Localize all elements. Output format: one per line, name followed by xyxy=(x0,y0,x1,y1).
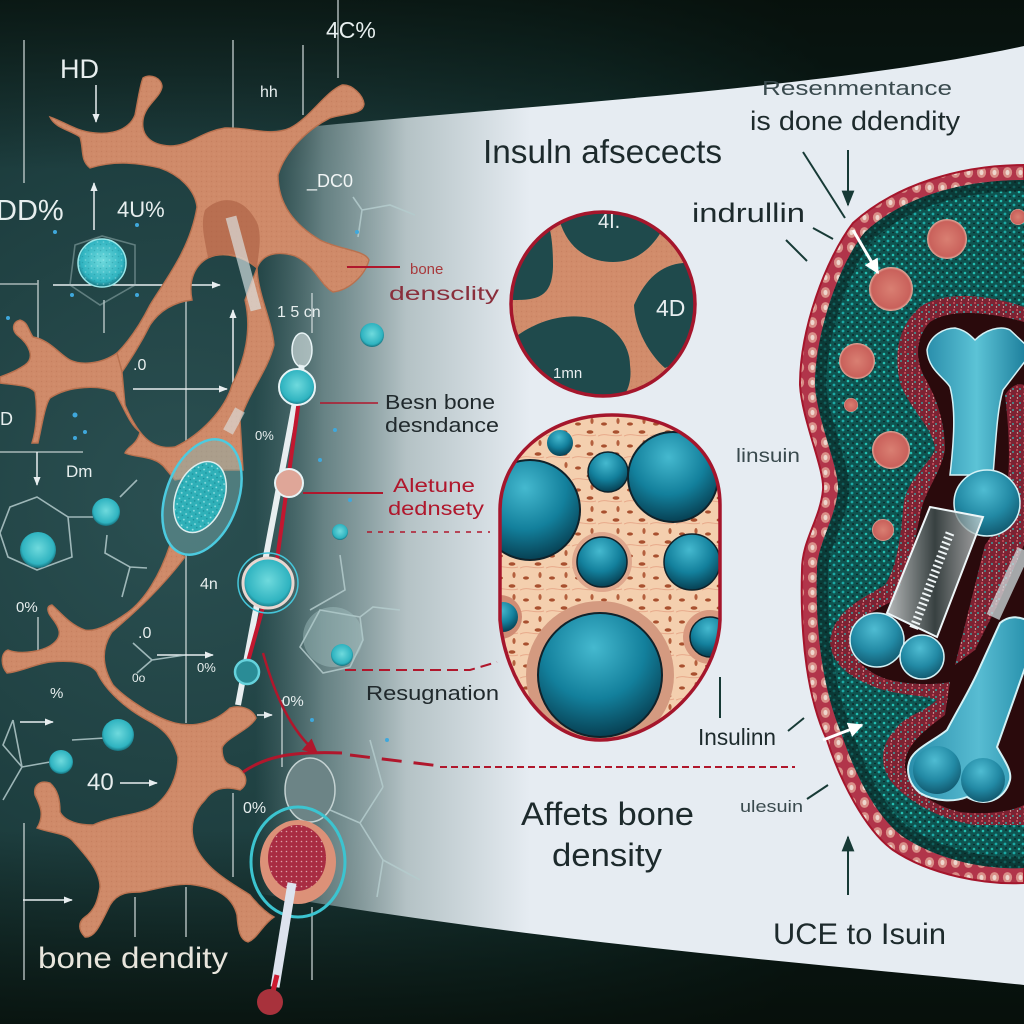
blue sparkles xyxy=(6,223,389,742)
chart labels on dark area: 1 5 cn xyxy=(277,304,321,321)
red labels: dednsety xyxy=(388,499,485,520)
glass syringe in cell xyxy=(228,217,256,432)
heading: Insuln afsecects xyxy=(483,133,722,170)
label: insulinn: Insulinn xyxy=(698,724,776,750)
upper bone xyxy=(927,328,1024,536)
dark halo around bones xyxy=(850,313,1024,813)
chart labels on dark area: _DC0 xyxy=(306,171,353,192)
circular inset: 4I. xyxy=(598,211,620,233)
chart labels on dark area: 0% xyxy=(197,660,216,675)
mid labels: Resugnation xyxy=(366,683,499,705)
bottom text: affects bone density: Affets bone xyxy=(521,796,694,832)
chart labels on dark area: 0% xyxy=(243,800,266,817)
bottom text: affects bone density: density xyxy=(552,837,662,873)
capsule xyxy=(148,428,256,566)
chart labels on dark area: .0 xyxy=(138,625,151,642)
label: insulin: linsuin xyxy=(736,446,800,467)
chart labels on dark area: 0o xyxy=(132,671,146,685)
circular inset: 1mn xyxy=(553,365,582,382)
label: indrullin: indrullin xyxy=(692,198,805,228)
right glass tube xyxy=(993,550,1024,617)
red bulb thermometer xyxy=(251,758,345,1015)
dark leader arrows xyxy=(720,150,848,895)
white arrows on organ xyxy=(823,230,878,740)
red speckle between bones xyxy=(955,384,1024,665)
lower right bone xyxy=(908,617,1024,802)
organ cross-section with bones xyxy=(800,160,1024,883)
red labels: densclity xyxy=(389,284,500,305)
cell shading xyxy=(203,200,260,268)
red labels xyxy=(388,261,500,520)
red labels: Aletune xyxy=(393,476,475,497)
chart labels on dark area: D xyxy=(0,409,13,429)
chart labels on dark area: .0 xyxy=(133,357,146,374)
red cells xyxy=(839,209,1024,541)
red leader lines xyxy=(243,267,795,772)
top right caption: is done ddendity xyxy=(750,106,961,136)
lower right bone heads xyxy=(913,746,1005,802)
speckled red band xyxy=(830,296,1024,825)
cell texture xyxy=(0,76,369,942)
chart labels on dark area xyxy=(0,17,376,817)
label: ulesuin: ulesuin xyxy=(740,797,803,816)
chart labels on dark area: 4n xyxy=(200,576,218,593)
molecule diagrams xyxy=(0,197,420,897)
chart labels on dark area: Dm xyxy=(66,462,92,481)
bottom text: uce to isuin: UCE to Isuin xyxy=(773,918,946,951)
chart labels on dark area: 4C% xyxy=(326,17,376,43)
top right caption xyxy=(750,78,961,136)
red labels: bone xyxy=(410,261,443,278)
small chart arrows xyxy=(20,85,272,900)
mid labels: desndance xyxy=(385,415,499,437)
chart labels on dark area: 40 xyxy=(87,769,114,796)
syringe tube with lower bone head xyxy=(850,507,983,679)
circular inset xyxy=(509,210,697,398)
chart labels on dark area: hh xyxy=(260,84,278,101)
mid labels xyxy=(366,392,499,705)
capsule inset: bone tissue xyxy=(498,413,722,742)
chart labels on dark area: % xyxy=(50,685,63,702)
grid lines xyxy=(0,0,338,980)
light panel xyxy=(255,46,1024,985)
mid labels: Besn bone xyxy=(385,392,495,414)
chart labels on dark area: 0% xyxy=(255,428,274,443)
chart labels on dark area: 0% xyxy=(16,599,38,616)
thermometer column xyxy=(235,333,315,705)
bone cell shape xyxy=(0,76,369,942)
bottom text: affects bone density xyxy=(521,796,694,873)
chart labels on dark area: 4U% xyxy=(117,197,165,222)
circular inset: 4D xyxy=(656,295,685,321)
top right caption: Resenmentance xyxy=(762,78,952,100)
glowing cyan cells xyxy=(20,239,384,774)
bottom-left label: bone dendity xyxy=(38,942,228,975)
chart labels on dark area: 0% xyxy=(282,693,304,710)
chart labels on dark area: HD xyxy=(60,54,99,84)
